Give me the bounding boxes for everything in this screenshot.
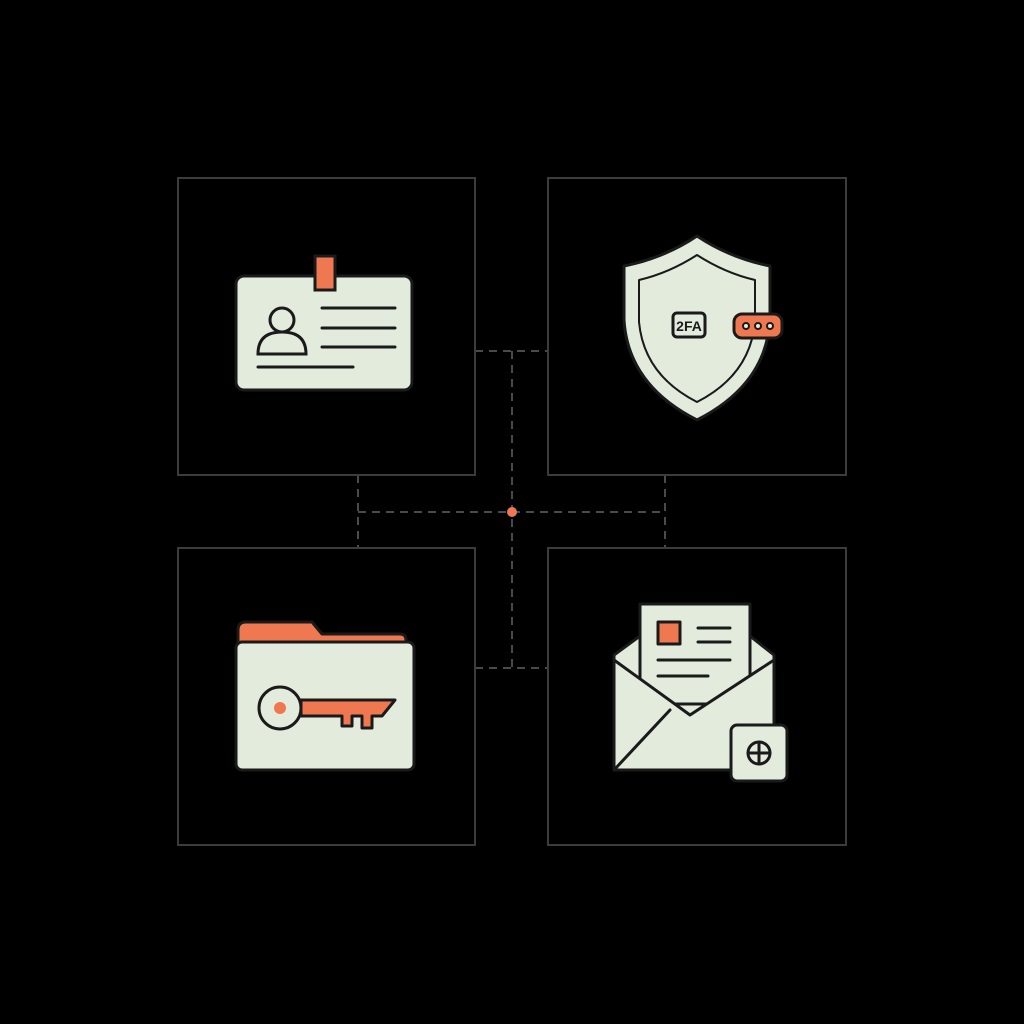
icon: shield with 2FA: 2FA [676,318,702,334]
icon: shield with 2FA [624,236,782,420]
icon: folder with key [236,622,414,770]
panel: identity card [178,178,475,475]
panel: 2FA shield [548,178,846,475]
icon: id card [236,256,412,390]
panel: key folder [178,548,475,845]
icon: envelope with letter and badge [614,604,787,781]
panel: secure email [548,548,846,845]
center node dot [507,507,517,517]
